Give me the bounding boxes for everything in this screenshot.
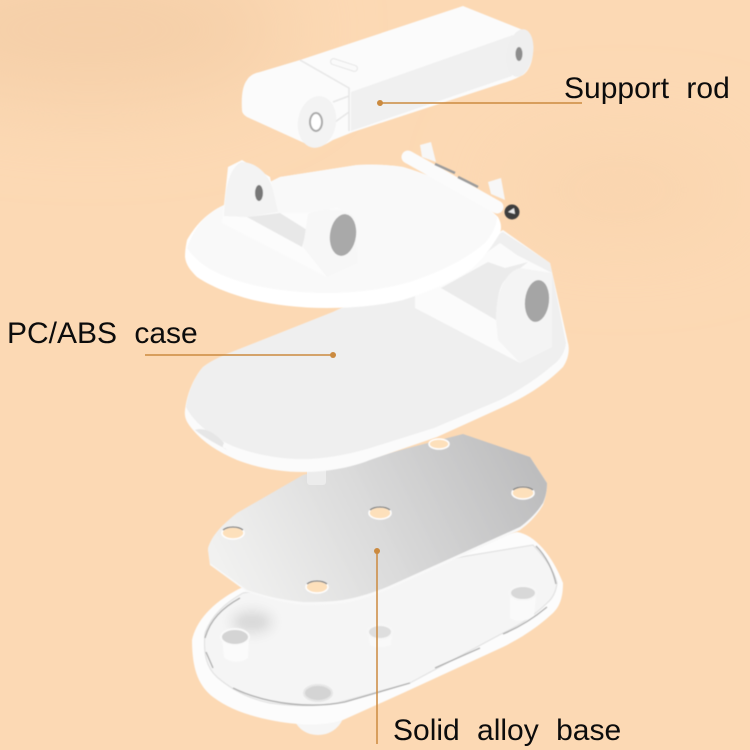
rod right hole [516,47,522,61]
rod body [242,6,533,147]
rod left hole [310,113,322,131]
hinge screw [504,204,520,220]
case rim [185,230,569,472]
bracket rear face [224,162,278,217]
bottom shell [192,532,563,735]
shell outer [192,532,563,725]
rod front face [351,35,513,131]
metal holes [222,439,534,593]
connecting pin [307,468,326,485]
callout: solid alloy base: Solid alloy base [393,714,621,747]
metal plate face [208,434,547,602]
shell inner shading [232,611,272,633]
callout: support rod: Support rod [564,72,730,105]
callout: PC/ABS case [7,317,336,358]
case lower-left notch [195,429,228,450]
plate top [187,165,497,293]
metal plate edge [208,435,547,605]
post bottom [304,685,332,701]
hinge strip [408,157,497,207]
callout: solid alloy base [374,548,621,747]
metal plate [208,434,547,605]
case top surface [186,232,566,459]
rod seam [300,60,349,131]
shell inner tray [204,545,557,706]
rod slider button [330,58,358,72]
hinge slots [435,164,478,187]
case bracket shade [441,262,528,320]
plate rim [185,165,501,308]
case bracket foot [415,243,552,363]
shell rim slots [205,546,556,705]
post left [221,629,249,662]
hinge tab right [488,178,505,200]
post center [368,625,392,647]
callout: PC/ABS case: PC/ABS case [7,317,198,350]
rod right cap [503,27,537,79]
upper mounting plate [185,142,520,308]
bracket front face [303,210,358,277]
lower case plate [185,230,569,472]
case bracket front [496,268,552,363]
rod left joint cap [294,93,340,151]
bracket rear hole [255,185,263,201]
post right [510,586,536,621]
callout: support rod [377,72,730,106]
support rod part [242,6,537,151]
hinge tab left [420,142,436,162]
shell foot [293,716,344,735]
bracket inner slot [247,213,307,247]
bracket front metal pin [327,212,359,258]
bracket base [222,160,358,277]
case metal pin [523,279,551,323]
